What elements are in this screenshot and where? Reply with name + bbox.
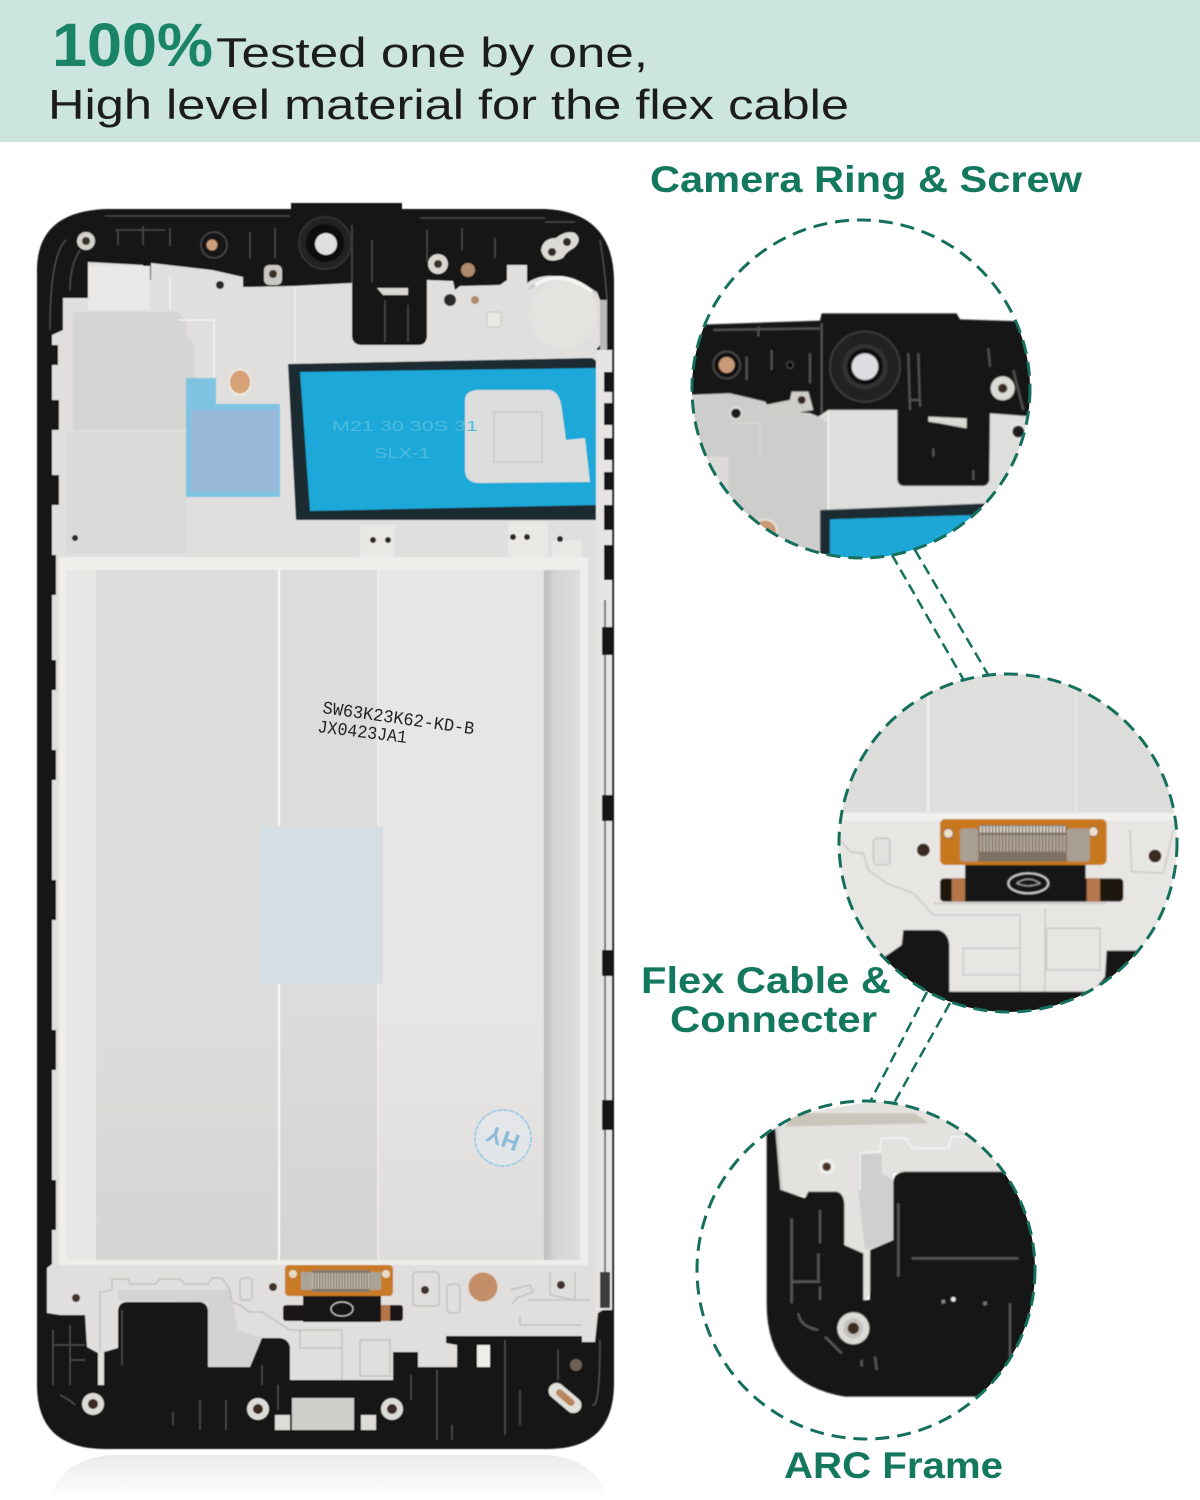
bottom frame details xyxy=(53,1310,600,1440)
top right round recess xyxy=(487,277,607,350)
heading: flex cable & connecter xyxy=(641,960,891,1040)
heading: tested one by one: Tested one by one, xyxy=(216,29,648,76)
lower plate details xyxy=(100,1272,590,1380)
lower copper hole xyxy=(468,1272,498,1302)
heading: 100%: 100% xyxy=(52,11,213,79)
heading: high level material: High level material for the flex cable xyxy=(48,81,849,128)
lower holes xyxy=(72,1281,565,1302)
bottom frame insert xyxy=(275,1345,490,1430)
printed part number: SW63K23K62-KD-B xyxy=(321,699,476,740)
upper plate panels xyxy=(73,312,195,430)
connector dashes between circle 1 and 2 xyxy=(892,550,990,684)
bottom screws xyxy=(82,1359,585,1420)
adhesive sticker xyxy=(288,358,598,520)
blue adhesive patch xyxy=(186,378,280,497)
copper hole xyxy=(229,370,251,394)
heading: arc frame: ARC Frame xyxy=(784,1445,1003,1486)
zoom circle: camera ring xyxy=(690,220,1033,563)
silver mid-plate xyxy=(47,262,603,1385)
zoom circle: arc frame xyxy=(697,1101,1038,1439)
heading: camera ring & screw: Camera Ring & Screw xyxy=(650,159,1082,200)
connector dashes between circle 2 and 3 xyxy=(870,992,950,1105)
panel: large rear plate xyxy=(59,557,588,1265)
black outer frame xyxy=(37,203,614,1449)
left ladder clips xyxy=(50,345,59,1230)
flex cable black tail xyxy=(303,1295,381,1322)
screws and holes at top xyxy=(77,232,579,306)
printed part number: JX0423JA1 xyxy=(316,718,408,749)
lower plate shading xyxy=(118,1290,262,1367)
phone frame photo xyxy=(37,203,614,1449)
earpiece slit xyxy=(377,288,408,295)
tape patch xyxy=(260,826,383,984)
tabs above rear plate xyxy=(72,522,582,557)
zoom circle: flex connector xyxy=(837,673,1183,1018)
sticker imprint text: SLX-1 xyxy=(374,445,430,462)
sticker imprint text: M21 30 30S 31 xyxy=(332,418,478,435)
sticker imprint text xyxy=(332,418,478,462)
heading: flex cable & connecter: Flex Cable & xyxy=(641,960,891,1001)
orange connector xyxy=(285,1265,393,1296)
inspection stamp xyxy=(475,1110,531,1166)
heading: flex cable & connecter: Connecter xyxy=(670,999,877,1040)
camera ring xyxy=(299,217,351,269)
right ladder clips xyxy=(596,350,612,1310)
flex connector slot xyxy=(283,1305,403,1321)
top frame details xyxy=(50,216,607,342)
header banner xyxy=(0,0,1200,142)
inspection stamp: HY xyxy=(483,1119,523,1156)
phone reflection xyxy=(48,1455,610,1500)
